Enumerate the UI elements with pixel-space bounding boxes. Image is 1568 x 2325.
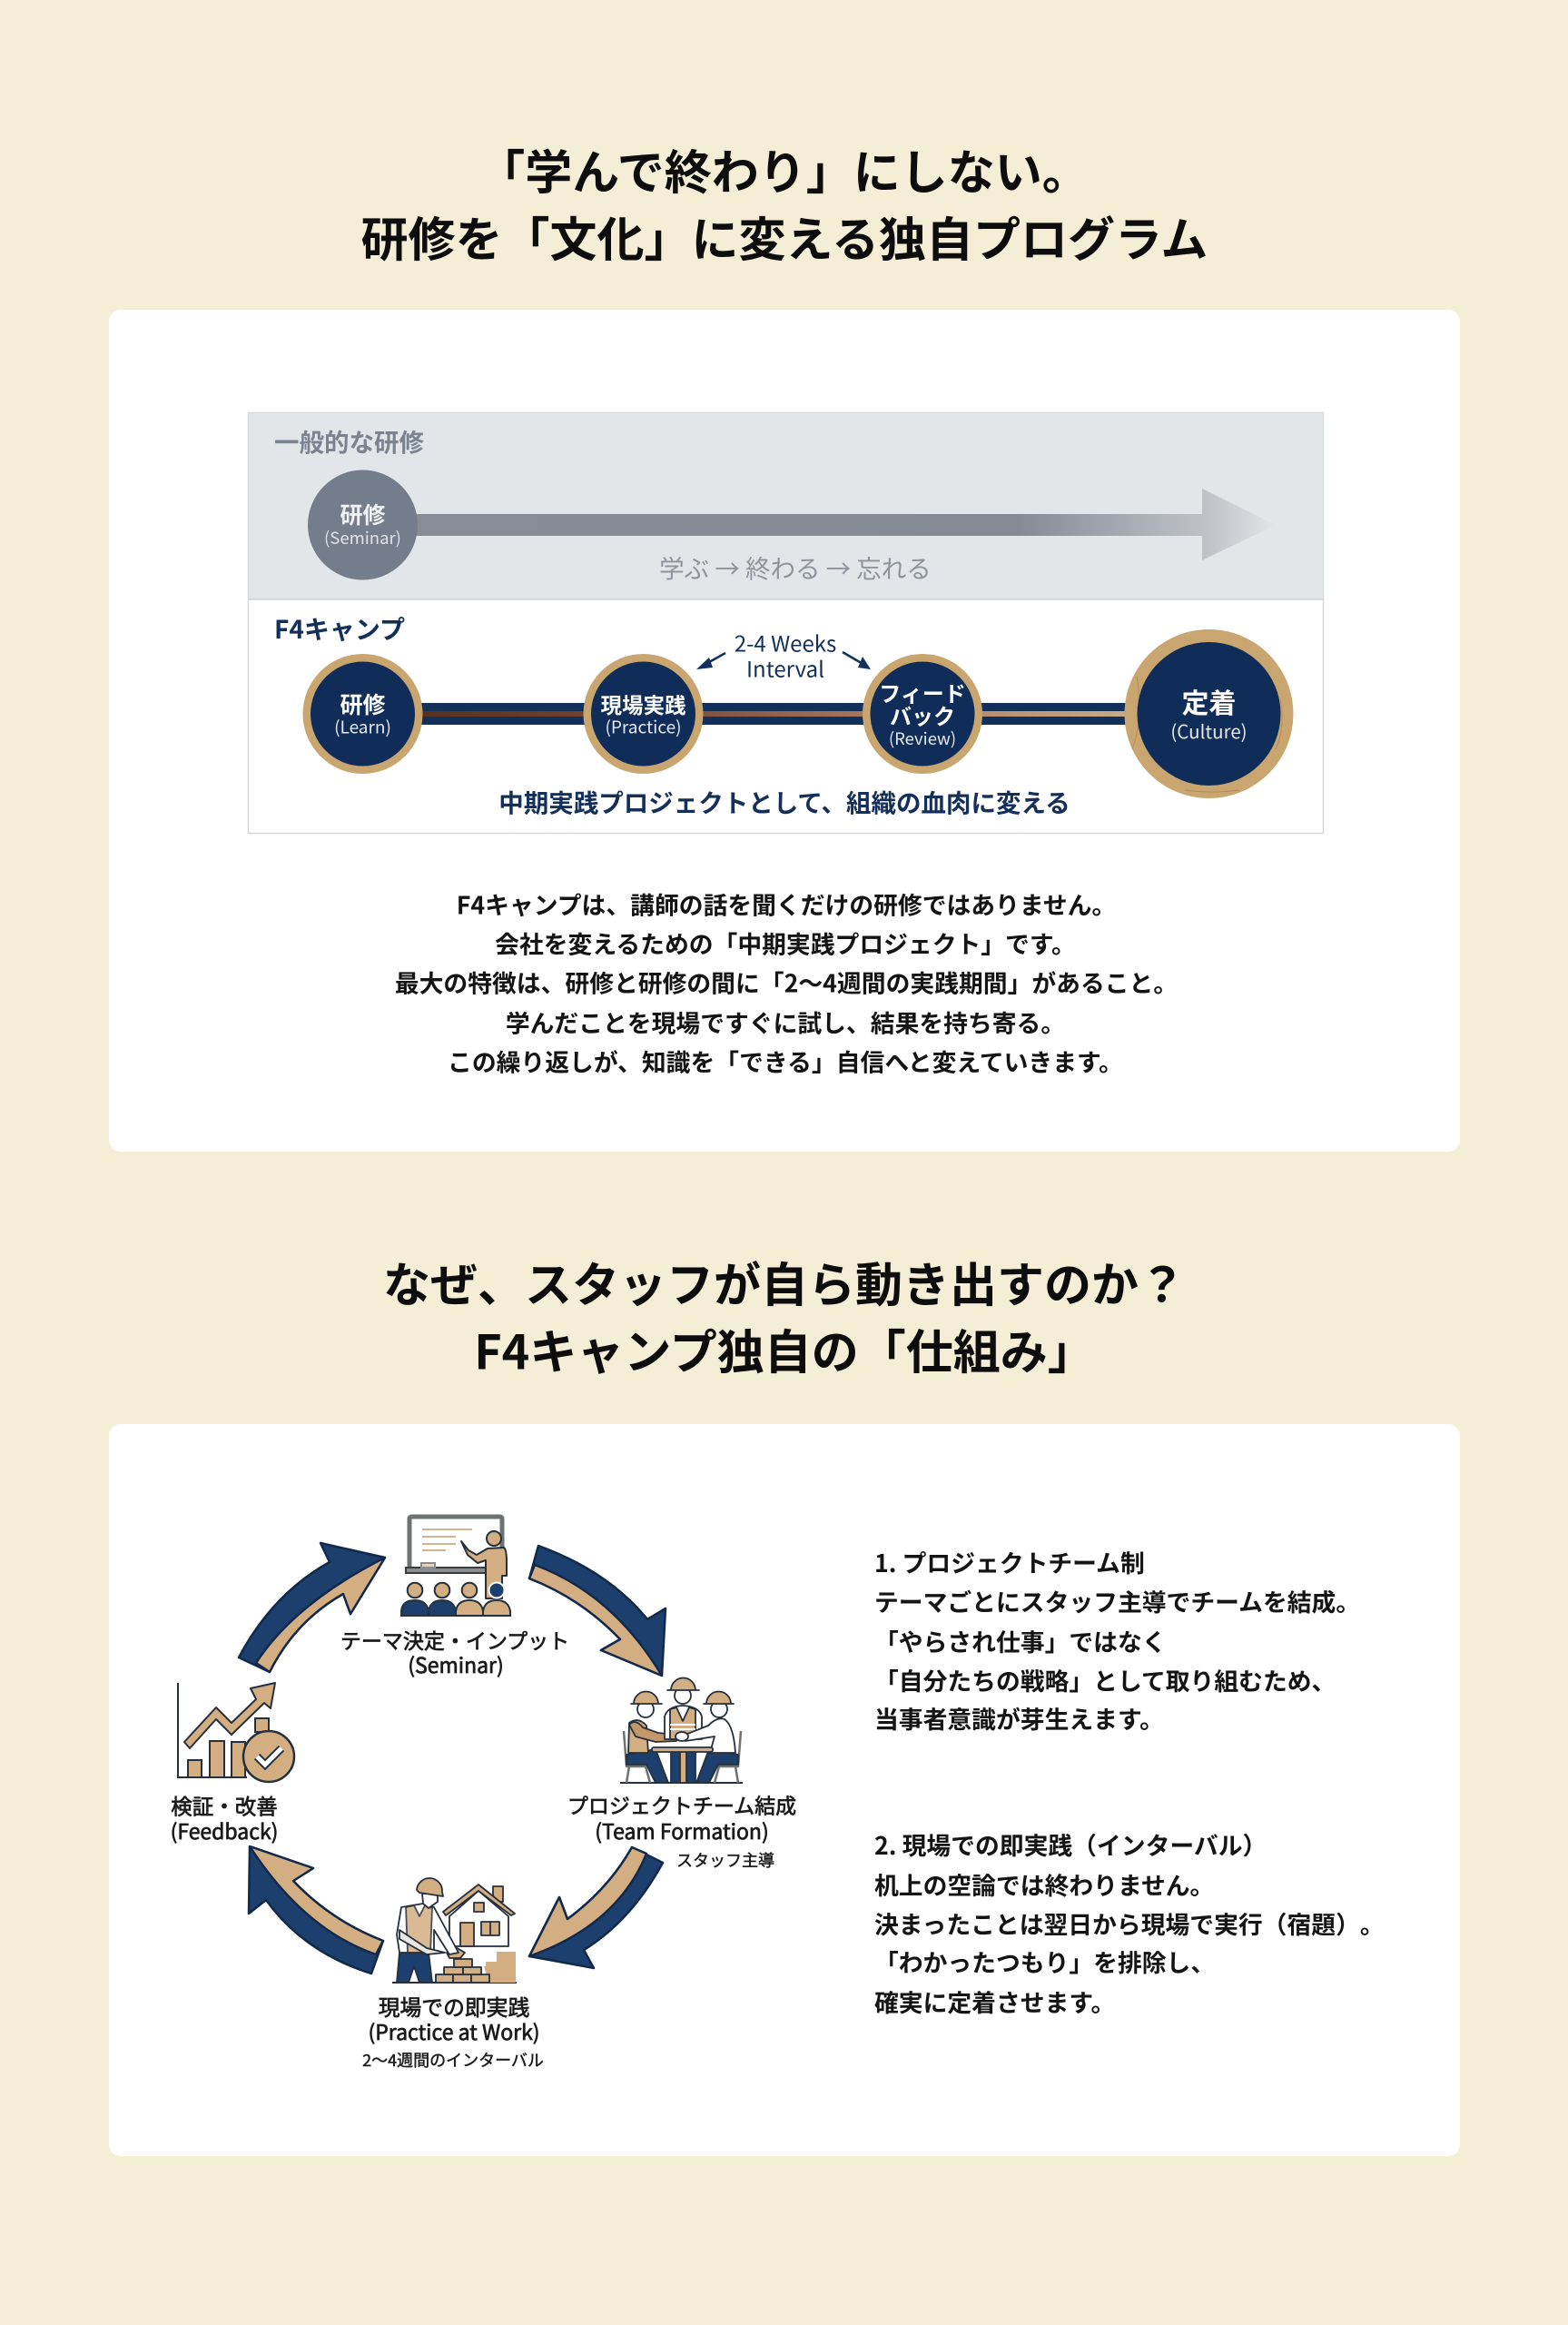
arrow: interval right [843,652,871,669]
label: feedback step [171,1789,278,1845]
arrow: seminar to team formation [529,1546,666,1676]
text block: program description [395,886,1178,1079]
heading: program title: 「学んで終わり」にしない。 [478,134,1090,203]
heading: program title: 研修を「文化」に変える独自プログラム [361,202,1208,271]
center worker [665,1678,702,1739]
label: seminar step: (Seminar) [408,1648,504,1679]
node: culture [1124,629,1293,798]
arrow: interval left [696,653,725,669]
text block: project team system [874,1544,1360,1736]
node: seminar [308,470,418,579]
heading: mechanism title [383,1248,1186,1382]
timeline connector [409,703,1153,725]
label: interval [735,627,836,683]
label: practice step [362,1990,544,2072]
brick wall [484,1952,516,1983]
bricks [436,1946,489,1983]
left worker [624,1691,676,1783]
icon: practice at work [392,1878,517,1983]
icon: seminar [401,1517,510,1616]
panel: mechanism card [109,1424,1460,2156]
text block: project team system: 「自分たちの戦略」として取り組むため、 [874,1662,1336,1697]
heading: mechanism title: F4キャンプ独自の「仕組み」 [474,1315,1095,1382]
arrow: feedback to seminar [239,1543,385,1672]
label: team formation step: (Team Formation) [595,1815,769,1845]
node: learn: (Learn) [334,714,391,739]
node: learn: 研修 [340,688,386,720]
text block: immediate practice [874,1826,1385,2019]
text block: project team system: 1. プロジェクトチーム制 [874,1544,1145,1579]
label: seminar step: テーマ決定・インプット [340,1624,569,1655]
icon: team formation [620,1678,743,1783]
node: practice: (Practice) [605,714,682,739]
text block: immediate practice: 「わかったつもり」を排除し、 [874,1944,1215,1979]
text block: program description: この繰り返しが、知識を「できる」自信へと変えていきます。 [448,1043,1123,1079]
node: practice: 現場実践 [601,688,686,719]
node: learn [303,654,423,774]
text block: project team system: 当事者意識が芽生えます。 [874,1700,1164,1736]
label: team formation step: プロジェクトチーム結成 [567,1789,796,1820]
label: interval: 2-4 Weeks [735,627,836,658]
arrow: fading line of general training [413,489,1276,560]
node: culture: (Culture) [1170,717,1247,744]
comparison diagram [248,412,1324,834]
caption: mid-term project: 中期実践プロジェクトとして、組織の血肉に変える [498,783,1070,819]
node: review: バック [890,699,955,730]
heading: program title [361,134,1208,271]
label: team formation step: スタッフ主導 [676,1848,774,1872]
text block: program description: F4キャンプは、講師の話を聞くだけの研修ではありません。 [457,886,1116,921]
label: F4 camp: F4キャンプ [274,610,405,647]
text block: project team system: テーマごとにスタッフ主導でチームを結成。 [874,1583,1360,1618]
right worker [685,1691,741,1783]
table [652,1732,713,1783]
label: practice step: (Practice at Work) [368,2015,540,2046]
worker [397,1878,459,1983]
node: practice [583,654,703,774]
label: feedback step: (Feedback) [171,1815,278,1845]
node: seminar: 研修 [340,498,386,530]
text block: program description: 最大の特徴は、研修と研修の間に「2〜4週間の実践期間」があること。 [395,965,1178,999]
arrow: practice to feedback [249,1846,383,1974]
icon: feedback chart [178,1683,294,1782]
node: review: (Review) [889,727,956,750]
text block: immediate practice: 机上の空論では終わりません。 [874,1866,1214,1902]
label: general training: 一般的な研修 [274,422,424,459]
panel: program comparison card [109,310,1460,1152]
label: interval: Interval [746,652,824,683]
node: culture: 定着 [1182,681,1237,721]
label: practice step: 2〜4週間のインターバル [362,2048,544,2072]
label: feedback step: 検証・改善 [171,1789,278,1820]
text block: program description: 会社を変えるための「中期実践プロジェクト」です。 [495,925,1076,961]
house [443,1885,515,1946]
text block: immediate practice: 確実に定着させます。 [874,1984,1115,2019]
text block: immediate practice: 決まったことは翌日から現場で実行（宿題）。 [874,1905,1385,1941]
text block: immediate practice: 2. 現場での即実践（インターバル） [874,1826,1267,1862]
node: review: フィード [879,676,966,708]
node: review [863,654,982,774]
arrow: team formation to practice [529,1847,663,1968]
heading: mechanism title: なぜ、スタッフが自ら動き出すのか？ [383,1248,1186,1315]
caption: learn end forget: 学ぶ → 終わる → 忘れる [659,549,932,585]
text block: program description: 学んだことを現場ですぐに試し、結果を持ち寄る。 [506,1004,1065,1039]
label: seminar step [340,1624,569,1679]
node: seminar: (Seminar) [324,526,401,549]
text block: project team system: 「やらされ仕事」ではなく [874,1623,1167,1658]
label: practice step: 現場での即実践 [379,1990,529,2022]
cycle diagram [171,1517,796,2072]
label: team formation step [567,1789,796,1872]
